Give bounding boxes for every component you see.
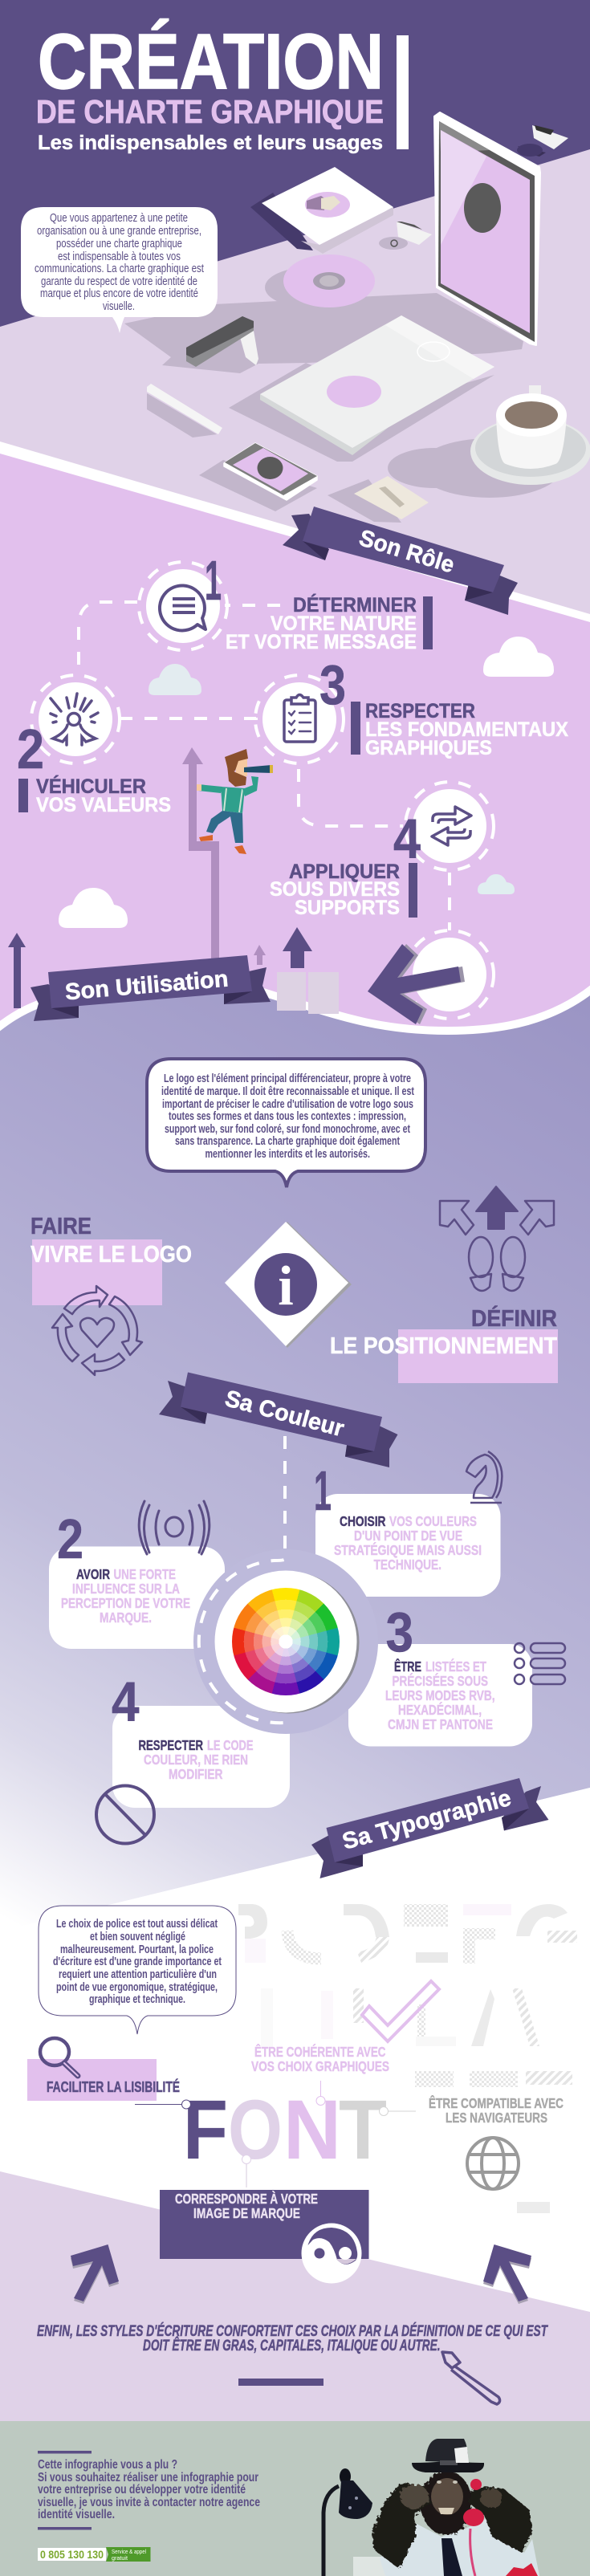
background: pale lilac closing section — [0, 2171, 590, 2421]
step 4 icon: exchange arrows — [432, 807, 471, 845]
card 4 text: COULEUR, NE RIEN — [144, 1752, 248, 1768]
typography speech bubble: requiert une attention particulière d'un — [59, 1968, 217, 1981]
card 4 text — [138, 1737, 254, 1782]
cloud right — [483, 637, 554, 677]
footer copy: Si vous souhaitez réaliser une infographie pour — [38, 2471, 258, 2484]
compact disc — [265, 254, 375, 307]
step 4 — [270, 782, 494, 919]
step 3 text: RESPECTER — [365, 700, 475, 722]
card 2 text: PERCEPTION DE VOTRE — [61, 1595, 190, 1611]
FONT wordmark — [183, 2083, 387, 2177]
card 4 text: RESPECTER — [138, 1737, 203, 1753]
monkey with hat and telephone — [353, 2439, 539, 2576]
logo speech bubble: support web, sur fond coloré, sur fond monochrome, avec et — [165, 1122, 410, 1136]
closing bar — [238, 2379, 323, 2386]
card 3 text: HEXADÉCIMAL, — [398, 1701, 482, 1718]
small pale arrow — [254, 945, 266, 965]
card 1 text: CHOISIR — [340, 1513, 386, 1529]
step 2 ring — [31, 675, 120, 763]
icon: magnifier — [40, 2038, 78, 2076]
FONT wordmark: N — [283, 2083, 341, 2177]
binder clip upper — [517, 125, 568, 157]
dashed route around wheel — [199, 1436, 286, 1723]
card 3 text: LISTÉES ET — [425, 1658, 486, 1675]
phone badge: gratuit — [112, 2554, 128, 2562]
logo speech bubble: important de préciser le cadre d'utilisation de votre logo sous — [162, 1097, 413, 1111]
definir le positionnement — [330, 1304, 558, 1383]
heading: DÉFINIR — [471, 1304, 557, 1332]
step 4 bar — [409, 863, 417, 918]
ribbon: Sa Couleur — [159, 1373, 398, 1467]
footer copy: Cette infographie vous a plu ? — [38, 2458, 177, 2472]
card 3 text: CMJN ET PANTONE — [388, 1716, 493, 1732]
arrow left — [71, 2244, 119, 2304]
dashed route: role steps — [79, 602, 450, 930]
card 1 text: TECHNIQUE. — [374, 1557, 441, 1573]
typography speech bubble: graphique et technique. — [89, 1992, 185, 2006]
closing statement — [37, 2322, 548, 2354]
card 3 text — [385, 1658, 494, 1732]
last step circle — [405, 930, 494, 1019]
logo speech bubble: Le logo est l'élément principal différenciateur, propre à votre — [164, 1072, 411, 1085]
intro speech bubble: Que vous appartenez à une petite — [50, 211, 188, 225]
stair arrow — [182, 747, 219, 958]
pocket knife — [186, 316, 258, 367]
background: lilac wave area — [0, 722, 590, 1031]
step 1 ring — [139, 562, 227, 650]
card 1 text — [334, 1513, 482, 1573]
step 2 bar — [18, 779, 28, 812]
icon: fountain pen — [442, 2352, 500, 2404]
background: footer — [0, 2421, 590, 2576]
ribbon: Son Rôle — [283, 507, 518, 615]
ribbon: Sa Couleur: Sa Couleur — [222, 1386, 347, 1442]
footer copy: visuelle, je vous invite à contacter notre agence — [38, 2496, 260, 2509]
logo speech bubble: toutes ses formes et dans tous les contextes : impression, — [169, 1109, 406, 1123]
intro speech bubble: posséder une charte graphique — [56, 237, 182, 250]
step 4 text: APPLIQUER — [289, 861, 400, 883]
intro speech bubble: est indispensable à toutes vos — [58, 250, 181, 263]
logo speech bubble: mentionner les interdits et les autorisés. — [205, 1147, 370, 1161]
colour card 4 — [96, 1671, 290, 1843]
step 1 — [139, 549, 433, 653]
intro speech bubble: communications. La charte graphique est — [35, 262, 205, 275]
monkey tie — [441, 2538, 462, 2576]
footer rule top — [38, 2451, 92, 2453]
card 2 text — [61, 1566, 190, 1626]
cloud lower left — [59, 888, 128, 928]
step 3 text: GRAPHIQUES — [365, 737, 492, 759]
monkey hand left — [400, 2484, 429, 2509]
binder clip lower — [379, 222, 432, 250]
logo speech bubble — [147, 1059, 425, 1187]
intro speech bubble: marque et plus encore de votre identité — [40, 287, 198, 300]
connector lines — [135, 2081, 416, 2187]
card 1 text: D'UN POINT DE VUE — [354, 1528, 462, 1544]
title: vertical bar — [397, 35, 409, 149]
step 4 number: 4 — [393, 808, 421, 870]
faire vivre le logo — [31, 1214, 192, 1375]
number 4: 4 — [112, 1671, 140, 1733]
step 4 text — [270, 861, 400, 919]
step 2 — [17, 675, 171, 816]
number 3: 3 — [385, 1601, 413, 1663]
step 1 number: 1 — [205, 549, 222, 612]
background: white diagonal stripe — [0, 442, 590, 622]
small arrow left — [8, 933, 26, 1008]
desk lamp — [323, 2468, 372, 2576]
logo speech bubble: sans transparence. La charte graphique doit également — [175, 1134, 400, 1148]
phone badge: 0 805 130 130 — [40, 2548, 104, 2561]
pale alphabet backdrop — [238, 1904, 577, 2213]
icon: list — [515, 1643, 565, 1684]
text: cohérente: VOS CHOIX GRAPHIQUES — [251, 2058, 389, 2074]
paper square — [250, 167, 393, 254]
typography speech bubble: point de vue ergonomique, stratégique, — [56, 1980, 218, 1994]
hat — [412, 2439, 484, 2472]
colour card 3 — [348, 1601, 565, 1747]
intro speech bubble: visuelle. — [103, 299, 135, 313]
big arrow — [368, 944, 465, 1024]
text: cohérente — [251, 2043, 389, 2074]
typography speech bubble: d'écriture est d'une grande importance et — [53, 1955, 222, 1968]
step 1 text: VOTRE NATURE — [271, 612, 417, 635]
footer copy — [38, 2458, 260, 2521]
booklet — [229, 315, 494, 462]
telephone cord — [470, 2529, 475, 2576]
cloud lower right — [478, 874, 515, 894]
icon: check mark — [362, 1981, 439, 2041]
intro speech bubble — [21, 207, 218, 333]
text: compatible — [429, 2094, 564, 2126]
pencil — [147, 384, 222, 437]
step 3 icon: clipboard — [284, 695, 315, 742]
background: lilac role section — [0, 450, 590, 1044]
background: white wave stripe — [0, 982, 590, 1031]
brand block: IMAGE DE MARQUE — [193, 2205, 300, 2221]
character with telescope — [197, 749, 273, 854]
step 4 text: SOUS DIVERS — [270, 878, 400, 901]
typography speech bubble: et bien souvent négligé — [90, 1930, 185, 1943]
footer copy: identité visuelle. — [38, 2508, 115, 2521]
step 4 text: SUPPORTS — [295, 897, 400, 919]
tablet — [434, 112, 540, 345]
closing statement: DOIT ÊTRE EN GRAS, CAPITALES, ITALIQUE OU AUTRE. — [143, 2337, 440, 2354]
pale buildings — [277, 972, 339, 1014]
card 3 text: PRÉCISÉES SOUS — [392, 1672, 488, 1689]
arrow right — [483, 2244, 531, 2304]
title: subtitle: DE CHARTE GRAPHIQUE — [36, 93, 384, 130]
icon: chess knight — [466, 1451, 502, 1503]
icon: prohibited sign — [96, 1785, 154, 1843]
step 3 text: LES FONDAMENTAUX — [365, 718, 568, 741]
ribbon: Sa Typographie: Sa Typographie — [340, 1785, 514, 1855]
colour wheel surround — [193, 1436, 378, 1734]
colour card 2 — [49, 1501, 225, 1649]
ribbon: Son Rôle: Son Rôle — [356, 525, 458, 579]
colour card 1 — [314, 1451, 502, 1597]
positioning icon: arrows and footprints — [440, 1186, 554, 1291]
heading white: VIVRE LE LOGO — [31, 1242, 192, 1268]
background: desk surface — [0, 149, 590, 622]
highlight block — [32, 1239, 162, 1305]
card 2 text: MARQUE. — [100, 1609, 152, 1626]
ribbon: Sa Typographie — [311, 1778, 549, 1878]
desk shadow — [124, 293, 523, 373]
step 2 icon: person with rays — [51, 694, 98, 745]
typography speech bubble: Le choix de police est tout aussi délicat — [56, 1917, 218, 1931]
step 2 number: 2 — [17, 718, 44, 780]
ribbon: Son Utilisation — [31, 955, 271, 1021]
footer text block — [38, 2451, 260, 2530]
phone badge: Service & appel — [112, 2548, 146, 2555]
step 3 number: 3 — [319, 653, 346, 716]
card 3 text: ÊTRE — [394, 1658, 421, 1675]
step 3 text — [365, 700, 568, 759]
cloud middle — [149, 664, 201, 695]
monkey red stain — [506, 2563, 538, 2576]
icon: yin yang — [302, 2224, 361, 2283]
coffee cup — [388, 385, 590, 498]
number 2: 2 — [57, 1508, 83, 1570]
monkey face — [431, 2478, 463, 2515]
smartphone — [199, 443, 317, 511]
step 1 bar — [423, 596, 433, 649]
background: top purple — [0, 0, 590, 337]
card 4 text: MODIFIER — [169, 1766, 223, 1782]
FONT wordmark: T — [339, 2083, 387, 2177]
ribbon: Son Utilisation: Son Utilisation — [64, 967, 230, 1006]
heading white: LE POSITIONNEMENT — [330, 1333, 557, 1359]
telephone handset — [463, 2509, 484, 2526]
icon: heart in circular arrows — [52, 1286, 142, 1375]
faciliter block — [27, 2038, 180, 2101]
monkey shirt — [380, 2518, 539, 2576]
brand block: CORRESPONDRE À VOTRE — [175, 2190, 318, 2207]
brand block — [160, 2190, 369, 2283]
background: white typography section — [0, 1788, 590, 2312]
step 2 text: VÉHICULER — [36, 775, 146, 798]
monkey arm left — [372, 2483, 431, 2569]
card 2 text: INFLUENCE SUR LA — [72, 1581, 180, 1597]
footer copy: votre entreprise ou développer votre identité — [38, 2483, 246, 2497]
number 1: 1 — [314, 1459, 332, 1522]
FONT wordmark: O — [228, 2083, 283, 2177]
footer rule bottom — [38, 2527, 92, 2530]
step 4 ring — [405, 782, 494, 870]
lisibilité highlight — [27, 2059, 157, 2101]
step 1 text: DÉTERMINER — [293, 593, 417, 617]
step 2 text: VOS VALEURS — [36, 794, 171, 816]
text: compatible: LES NAVIGATEURS — [446, 2110, 547, 2126]
card 2 text: UNE FORTE — [114, 1566, 176, 1582]
lisibilité text: FACILITER LA LISIBILITÉ — [47, 2078, 180, 2095]
card 3 text: LEURS MODES RVB, — [385, 1687, 494, 1703]
typography speech bubble — [39, 1906, 236, 2034]
background: purple gradient section — [0, 963, 590, 1931]
step 3 — [255, 653, 568, 763]
logo speech bubble: identité de marque. Il doit être reconnaissable et unique. Il est — [161, 1085, 414, 1098]
card 2 text: AVOIR — [76, 1566, 110, 1582]
title: tagline: Les indispensables et leurs usages — [38, 132, 383, 154]
FONT wordmark: F — [183, 2083, 228, 2177]
business card — [328, 476, 429, 523]
illustration: desk objects — [124, 112, 590, 523]
intro speech bubble: garante du respect de votre identité de — [41, 275, 197, 288]
step 1 text: ET VOTRE MESSAGE — [226, 631, 417, 653]
monkey head — [421, 2471, 472, 2535]
step 1 icon: chat bubble — [160, 585, 205, 630]
colour wheel — [232, 1588, 340, 1695]
icon: sound waves — [139, 1501, 210, 1554]
medium arrow — [283, 927, 312, 968]
info diamond — [225, 1222, 352, 1348]
step 2 text — [36, 775, 171, 816]
monkey hand right — [480, 2489, 503, 2508]
paper stack — [353, 2557, 387, 2576]
title: main: CRÉATION — [38, 18, 384, 105]
title block — [36, 18, 409, 154]
heading: FAIRE — [31, 1214, 92, 1239]
monkey arm right — [468, 2487, 532, 2553]
highlight block — [398, 1329, 558, 1383]
typography speech bubble: malheureusement. Pourtant, la police — [60, 1943, 214, 1956]
text: cohérente: ÊTRE COHÉRENTE AVEC — [254, 2043, 386, 2060]
card 4 text: LE CODE — [207, 1737, 254, 1753]
phone badge — [38, 2547, 151, 2562]
icon: globe — [467, 2138, 519, 2189]
step 1 text — [226, 593, 417, 653]
intro speech bubble: organisation ou à une grande entreprise, — [37, 224, 201, 238]
card 1 text: STRATÉGIQUE MAIS AUSSI — [334, 1541, 482, 1558]
step 3 ring — [255, 675, 344, 763]
info diamond: i — [278, 1255, 294, 1317]
card 1 text: VOS COULEURS — [389, 1513, 477, 1529]
step 3 bar — [351, 702, 360, 755]
